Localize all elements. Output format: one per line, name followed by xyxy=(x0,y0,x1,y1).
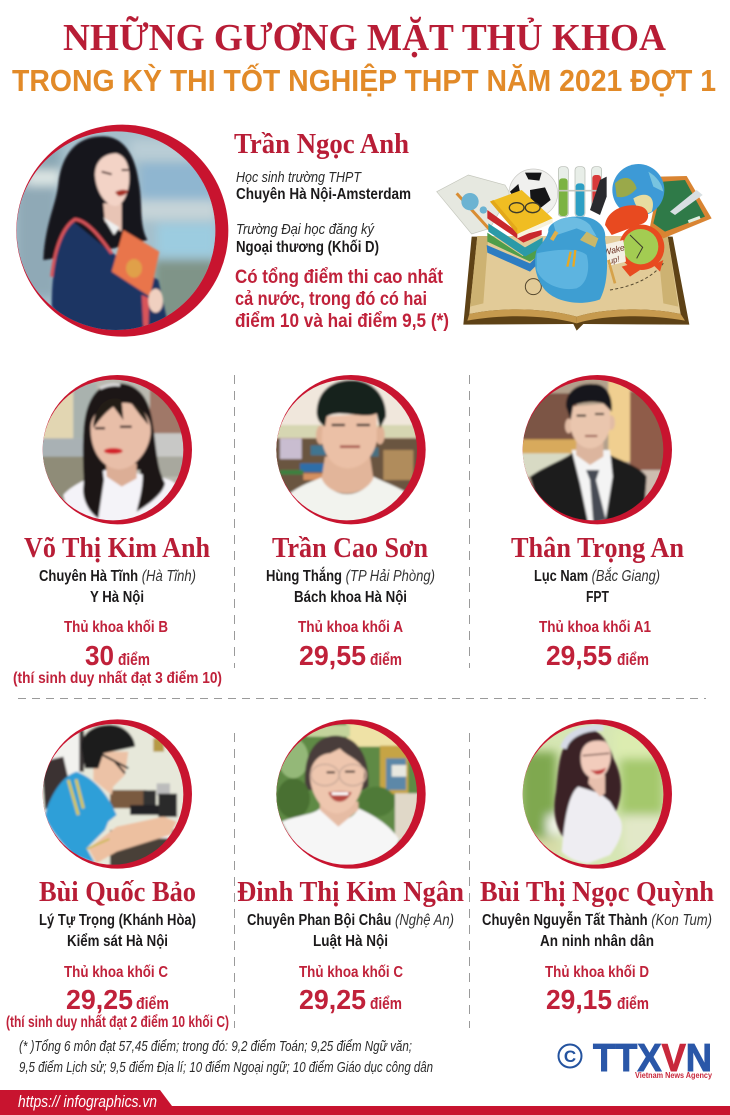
illustration: book and school items xyxy=(437,164,712,331)
footnote: 9,5 điểm Lịch sử; 9,5 điểm Địa lí; 10 điểm Ngoại ngữ; 10 điểm Giáo dục công dân xyxy=(19,1059,433,1076)
footer bar xyxy=(0,1090,730,1115)
school: Chuyên Hà Tĩnh (Hà Tĩnh) xyxy=(39,568,196,585)
block: Thủ khoa khối A1 xyxy=(539,619,651,636)
highlight text: Có tổng điểm thi cao nhất xyxy=(235,266,443,288)
name: Bùi Quốc Bảo xyxy=(39,876,196,908)
test tubes xyxy=(558,167,568,217)
university: FPT xyxy=(586,589,609,606)
score: 29,55 xyxy=(546,640,612,671)
panel: Trần Cao Sơn xyxy=(266,375,435,671)
score: 30 xyxy=(85,640,114,671)
highlight text: cả nước, trong đó có hai xyxy=(235,288,427,310)
panel: Võ Thị Kim Anh xyxy=(13,375,222,687)
backpack xyxy=(535,216,607,303)
logo: TTXVN: TTXVN xyxy=(593,1037,712,1080)
stack of books xyxy=(487,245,537,272)
name: Trần Cao Sơn xyxy=(272,532,428,564)
portrait xyxy=(520,375,672,524)
score: điểm xyxy=(617,994,649,1013)
globe xyxy=(612,164,664,216)
score: 29,15 xyxy=(546,984,612,1015)
footnote xyxy=(19,1038,433,1076)
school label: Học sinh trường THPT xyxy=(236,169,363,186)
school: Chuyên Phan Bội Châu (Nghệ An) xyxy=(247,912,454,929)
name: Bùi Thị Ngọc Quỳnh xyxy=(480,876,714,908)
school: Lục Nam (Bắc Giang) xyxy=(534,568,660,585)
name: Trần Ngọc Anh xyxy=(234,128,409,160)
football xyxy=(509,169,558,218)
portrait: Trần Ngọc Anh xyxy=(10,120,230,340)
score: điểm xyxy=(118,650,150,669)
portrait xyxy=(273,375,426,524)
name: Đinh Thị Kim Ngân xyxy=(237,876,464,908)
title: NHỮNG GƯƠNG MẶT THỦ KHOA xyxy=(63,15,667,59)
block: Thủ khoa khối B xyxy=(64,619,168,636)
score: điểm xyxy=(370,994,402,1013)
alarm clock xyxy=(605,205,648,235)
panel: Thân Trọng An xyxy=(511,375,684,671)
score xyxy=(299,984,402,1015)
university: Bách khoa Hà Nội xyxy=(294,589,407,606)
block: Thủ khoa khối A xyxy=(298,619,403,636)
school: Lý Tự Trọng (Khánh Hòa) xyxy=(39,912,196,929)
highlight text: điểm 10 và hai điểm 9,5 (*) xyxy=(235,310,449,332)
school: Hùng Thắng (TP Hải Phòng) xyxy=(266,567,435,585)
school: Chuyên Hà Nội-Amsterdam xyxy=(236,186,411,203)
score: điểm xyxy=(136,994,169,1013)
university: Y Hà Nội xyxy=(90,589,144,606)
microscope xyxy=(590,177,607,215)
university label: Trường Đại học đăng ký xyxy=(236,221,375,238)
score xyxy=(546,640,649,671)
score: 29,55 xyxy=(299,640,366,671)
note: (thí sinh duy nhất đạt 3 điểm 10) xyxy=(13,670,222,687)
chalkboard xyxy=(650,176,712,238)
website: https:// infographics.vn xyxy=(18,1092,157,1111)
panel: Bùi Thị Ngọc Quỳnh xyxy=(480,719,714,1015)
block: Thủ khoa khối C xyxy=(64,964,168,981)
school: Chuyên Nguyễn Tất Thành (Kon Tum) xyxy=(482,912,712,929)
university: Kiểm sát Hà Nội xyxy=(67,933,168,950)
dividers xyxy=(18,375,706,1028)
score: 29,25 xyxy=(66,984,133,1015)
panel: Bùi Quốc Bảo xyxy=(6,719,229,1031)
score: điểm xyxy=(370,650,402,669)
block: Thủ khoa khối D xyxy=(545,964,649,981)
highlight text xyxy=(235,266,449,332)
university: An ninh nhân dân xyxy=(540,933,654,950)
portrait xyxy=(40,719,192,869)
university: Ngoại thương (Khối D) xyxy=(236,239,379,256)
score: 29,25 xyxy=(299,984,366,1015)
score: điểm xyxy=(617,650,649,669)
university: Luật Hà Nội xyxy=(313,933,388,950)
portrait xyxy=(40,375,192,524)
title xyxy=(12,15,716,98)
paper roll xyxy=(437,175,510,234)
logo: TTXVN: C xyxy=(564,1047,576,1066)
panel: top scorer Trần Ngọc Anh xyxy=(10,120,712,340)
score xyxy=(546,984,649,1015)
block: Thủ khoa khối C xyxy=(299,964,403,981)
portrait xyxy=(520,719,672,869)
score xyxy=(299,640,402,671)
footnote: (* )Tổng 6 môn đạt 57,45 điểm; trong đó: 9,2 điểm Toán; 9,25 điểm Ngữ văn; xyxy=(19,1038,412,1055)
note: (thí sinh duy nhất đạt 2 điểm 10 khối C) xyxy=(6,1014,229,1031)
score xyxy=(85,640,150,671)
name: Thân Trọng An xyxy=(511,532,684,564)
name: Võ Thị Kim Anh xyxy=(24,532,210,564)
illustration: book and school items: up! xyxy=(608,254,621,266)
portrait xyxy=(273,719,426,869)
logo: TTXVN: Vietnam News Agency xyxy=(635,1070,712,1080)
score xyxy=(66,984,169,1015)
illustration: book and school items: Wake xyxy=(602,242,626,258)
panel: Đinh Thị Kim Ngân xyxy=(237,719,464,1015)
